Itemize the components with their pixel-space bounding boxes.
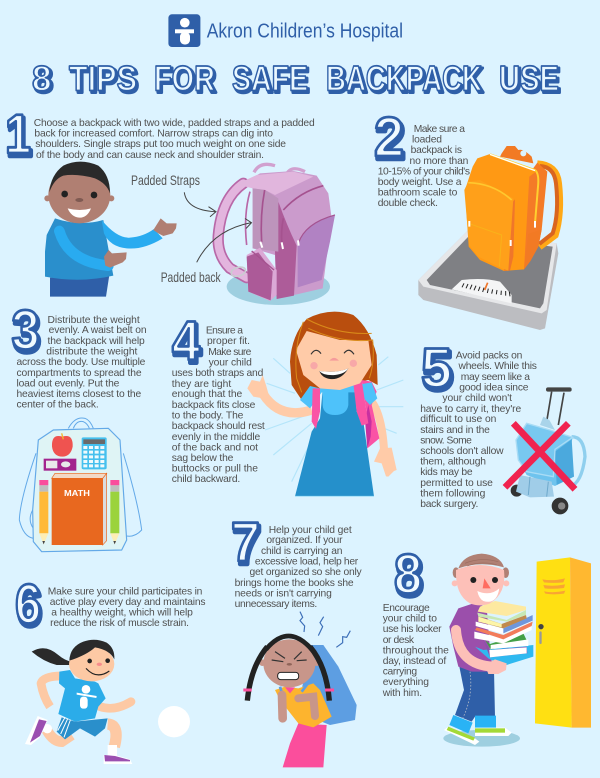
tip 3 text: the backpack will help	[48, 336, 145, 347]
collar	[285, 687, 295, 693]
top panel	[237, 172, 313, 195]
number 5: 5	[421, 336, 452, 399]
front pocket	[247, 248, 277, 301]
shadow	[227, 268, 330, 305]
tip 5 text: wheels. While this	[458, 361, 537, 372]
illustration: boy pointing	[44, 162, 177, 297]
illustration: boy carrying books by locker	[443, 554, 591, 747]
tip 4 text	[172, 326, 265, 485]
stress squiggles	[300, 612, 350, 647]
arms	[269, 695, 296, 718]
tip 1 text: back for increased comfort. Narrow straps can dig into	[34, 128, 273, 140]
illustration: backpack contents	[19, 418, 142, 552]
arm and hand	[456, 630, 493, 667]
title: BACKPACK	[328, 61, 484, 100]
tip 2 text: Make sure a	[414, 124, 465, 135]
back leg	[47, 730, 72, 742]
title: 8	[32, 60, 52, 98]
hair	[290, 312, 378, 400]
tip 5 text: Avoid packs on	[456, 350, 523, 362]
rays	[265, 357, 403, 482]
handles	[254, 164, 305, 179]
tip 8 text: your child to	[383, 614, 437, 624]
shirt	[58, 670, 106, 722]
title: SAFE	[234, 61, 310, 100]
tip 5 text: difficult to use on	[420, 414, 497, 425]
shirt	[275, 683, 332, 727]
ball	[158, 706, 190, 737]
title: USE	[499, 60, 559, 98]
title: TIPS	[69, 60, 137, 98]
zippers	[261, 186, 323, 244]
number 6: 6	[15, 572, 41, 635]
side strap	[570, 437, 585, 487]
number 3: 3	[12, 298, 40, 361]
tip 7 text: unnecessary items.	[235, 599, 317, 610]
tip 2 text	[378, 124, 470, 209]
tip 5 text: may seem like a	[461, 372, 530, 383]
body dark front	[275, 202, 297, 299]
tip 7 text: excessive load, help her	[255, 556, 359, 568]
tip 2 text: body weight. Use a	[378, 177, 462, 188]
purple case	[44, 459, 76, 471]
illustration: girl struggling under heavy backpack	[243, 612, 357, 767]
tip 4 text: sag below the	[172, 453, 234, 464]
shadow	[443, 730, 520, 747]
padded back panel	[253, 188, 278, 252]
number 8: 8	[396, 545, 424, 608]
tip 5 text: your child won't	[442, 393, 512, 404]
tip 3 text: distribute the weight	[46, 346, 138, 358]
tip 2 text: double check.	[378, 198, 438, 209]
hair and braids	[266, 636, 312, 649]
tip 7 text: child is carrying an	[261, 546, 343, 557]
boy arm far	[102, 220, 163, 249]
number 4: 4	[174, 312, 202, 375]
tip 5 text: permitted to use	[420, 478, 493, 489]
straps	[19, 418, 142, 538]
top handle	[500, 146, 533, 163]
top zip	[490, 154, 538, 223]
tip 3 text: center of the back.	[16, 400, 99, 410]
boy sweater	[45, 218, 113, 280]
tip 8 text: throughout the	[383, 646, 449, 656]
shirt	[449, 603, 493, 672]
face	[272, 652, 307, 662]
tip 1 text: shoulders. Single straps put too much weight on one side	[35, 139, 286, 150]
tip 3 text: heaviest items closest to the	[16, 389, 141, 400]
tip 5 text: stairs and in the	[420, 425, 490, 436]
shorts	[57, 717, 108, 739]
lower pocket	[516, 475, 554, 497]
shirt logo	[82, 685, 90, 694]
title: USE	[501, 61, 561, 100]
tip 2 text: bathroom scale to	[378, 188, 458, 198]
number 1: 1	[5, 102, 31, 165]
tip 4 text: buttocks or pull the	[172, 464, 258, 474]
number 1: 1	[6, 105, 32, 168]
tip 4 text: uses both straps and	[172, 368, 264, 379]
title: TIPS	[71, 61, 139, 100]
lower right pad	[524, 229, 542, 269]
side strap	[537, 164, 559, 247]
boy hands	[153, 218, 177, 236]
illustration: orange backpack on scale	[418, 146, 559, 330]
tip 1 text: of the body and can cause neck and shoulder strain.	[36, 150, 264, 161]
tip 3 text	[16, 315, 147, 410]
title: SAFE	[232, 60, 308, 98]
tip 4 text: evenly in the middle	[172, 432, 260, 443]
shoes	[449, 715, 473, 733]
tip 7 text	[235, 525, 363, 610]
tip 5 text: back surgery.	[420, 499, 478, 510]
tip 5 text: have to carry it, they're	[420, 404, 521, 415]
tip 3 text: compartments to spread the	[16, 368, 142, 379]
number 2: 2	[374, 105, 404, 168]
label: padded straps with arrow: Padded Straps	[131, 172, 200, 188]
tip 6 text: active play every day and maintains	[50, 597, 205, 608]
ring	[230, 266, 247, 278]
tip 7 text: brings home the books she	[235, 578, 354, 589]
tip 5 text: good idea since	[459, 382, 529, 394]
tip 4 text: to the body. The	[172, 410, 244, 422]
straps	[312, 388, 320, 429]
book	[103, 473, 107, 545]
illustration: girl with thumbs up	[247, 312, 403, 496]
tip 5 text: schools don't allow	[420, 446, 504, 457]
number 8: 8	[394, 542, 422, 605]
back layer	[512, 163, 547, 269]
tip 5 text: kids may be	[420, 467, 473, 478]
number 3: 3	[13, 301, 41, 364]
scale dial	[452, 279, 512, 303]
number 5: 5	[422, 339, 454, 402]
number 4: 4	[172, 309, 200, 372]
trolley handle	[547, 392, 564, 425]
tip 4 text: enough that the	[172, 389, 242, 400]
tip 6 text: reduce the risk of muscle strain.	[50, 618, 189, 629]
head	[259, 659, 266, 666]
locker	[535, 557, 572, 728]
tip 4 text: they are tight	[172, 379, 231, 390]
main body	[465, 154, 537, 271]
face	[296, 331, 372, 390]
tip 1 text: Choose a backpack with two wide, padded straps and a padded	[34, 118, 315, 129]
tip 6 text	[48, 586, 205, 629]
right arm	[372, 402, 384, 449]
tip 4 text: child backward.	[172, 474, 240, 485]
tip 3 text: evenly. A waist belt on	[49, 325, 147, 336]
tip 3 text: load out evenly. Put the	[16, 378, 120, 390]
backpack	[302, 645, 357, 725]
hair lines	[296, 319, 373, 392]
front shoe	[104, 755, 132, 764]
calculator	[82, 437, 107, 469]
pencil green	[110, 480, 119, 485]
tip 4 text: proper fit.	[207, 336, 250, 347]
red cross	[505, 423, 575, 489]
tip 4 text: Ensure a	[206, 326, 243, 336]
back arm	[41, 676, 62, 707]
skirt	[283, 723, 327, 767]
tip 8 text: everything	[383, 677, 429, 688]
tip 3 text: across the body. Use multiple	[16, 357, 146, 368]
pack body	[33, 428, 127, 552]
illustration: backpack contents: MATH	[64, 489, 90, 498]
tip 6 text: Make sure your child participates in	[48, 586, 203, 598]
tip 7 text: organized. If your	[266, 535, 343, 546]
front arm	[100, 702, 131, 708]
tip 4 text: Make sure	[208, 347, 252, 358]
tip 4 text: backpack should rest	[172, 421, 265, 432]
pocket	[504, 199, 515, 271]
tip 4 text: of the back and not	[172, 442, 258, 454]
head	[69, 647, 114, 681]
backpack behind	[362, 380, 379, 448]
dress	[295, 390, 374, 496]
logo: Akron Children's Hospital: Akron Children’s Hospital	[207, 20, 403, 42]
tip 5 text: snow. Some	[420, 436, 472, 446]
left arm	[263, 394, 312, 413]
tip 7 text: needs or isn't carrying	[235, 588, 332, 600]
title: 8	[34, 61, 53, 100]
zip pulls	[469, 221, 535, 246]
head	[453, 567, 459, 578]
tip 3 text: Distribute the weight	[48, 315, 140, 326]
tip 5 text: them following	[420, 488, 486, 500]
tip 2 text: backpack is	[411, 145, 462, 156]
tip 4 text: your child	[209, 358, 252, 368]
jeans	[455, 667, 495, 722]
boy trousers	[50, 275, 109, 297]
tip 5 text: them, although	[420, 456, 486, 468]
tip 8 text	[382, 603, 449, 699]
title: FOR	[154, 60, 215, 98]
label: padded straps with arrow	[131, 172, 216, 217]
title	[32, 60, 561, 100]
number 7: 7	[231, 510, 260, 573]
main silhouette	[243, 171, 332, 299]
number 7: 7	[232, 513, 262, 576]
tip 7 text: get organized so she only	[250, 567, 363, 578]
number 6: 6	[16, 575, 42, 638]
arrow and label: padded back	[161, 218, 252, 285]
tip 2 text: loaded	[412, 134, 442, 145]
arrow and label: padded back: Padded back	[161, 269, 221, 285]
scale base	[418, 232, 558, 330]
pack body	[516, 423, 573, 486]
tip 8 text: day, instead of	[383, 656, 446, 667]
logo: Akron Children's Hospital	[168, 14, 403, 47]
illustration: running girl with ball	[25, 640, 190, 764]
number 2: 2	[376, 108, 406, 171]
illustration: rolling backpack crossed out	[505, 387, 585, 514]
illustration: pink backpack	[218, 164, 335, 305]
apple	[52, 436, 73, 457]
tip 8 text: carrying	[383, 666, 417, 678]
tip 8 text: use his locker	[383, 624, 442, 635]
tip 8 text: Encourage	[383, 603, 430, 614]
tip 1 text	[34, 118, 315, 161]
shoulder strap	[218, 183, 247, 278]
tip 8 text: with him.	[382, 688, 422, 699]
boy arm near	[59, 231, 108, 266]
title: FOR	[156, 61, 217, 100]
title: BACKPACK	[326, 60, 482, 98]
wheels	[511, 485, 523, 497]
front leg	[108, 724, 116, 747]
tip 5 text	[420, 350, 537, 510]
pencil yellow	[39, 480, 48, 485]
tip 4 text: backpack fits close	[172, 400, 256, 411]
tip 6 text: a healthy weight, which will help	[51, 608, 193, 618]
tip 2 text: 10-15% of your child's	[378, 166, 470, 178]
books	[475, 645, 533, 666]
tip 2 text: no more than	[410, 156, 469, 167]
back shoe	[25, 716, 48, 745]
side pocket	[298, 215, 335, 287]
ponytail	[32, 648, 72, 665]
top loop	[540, 417, 555, 430]
tip 8 text: or desk	[383, 635, 415, 646]
tip 7 text: Help your child get	[269, 525, 352, 536]
boy head	[44, 195, 50, 201]
sleeves and shirt	[300, 382, 377, 408]
